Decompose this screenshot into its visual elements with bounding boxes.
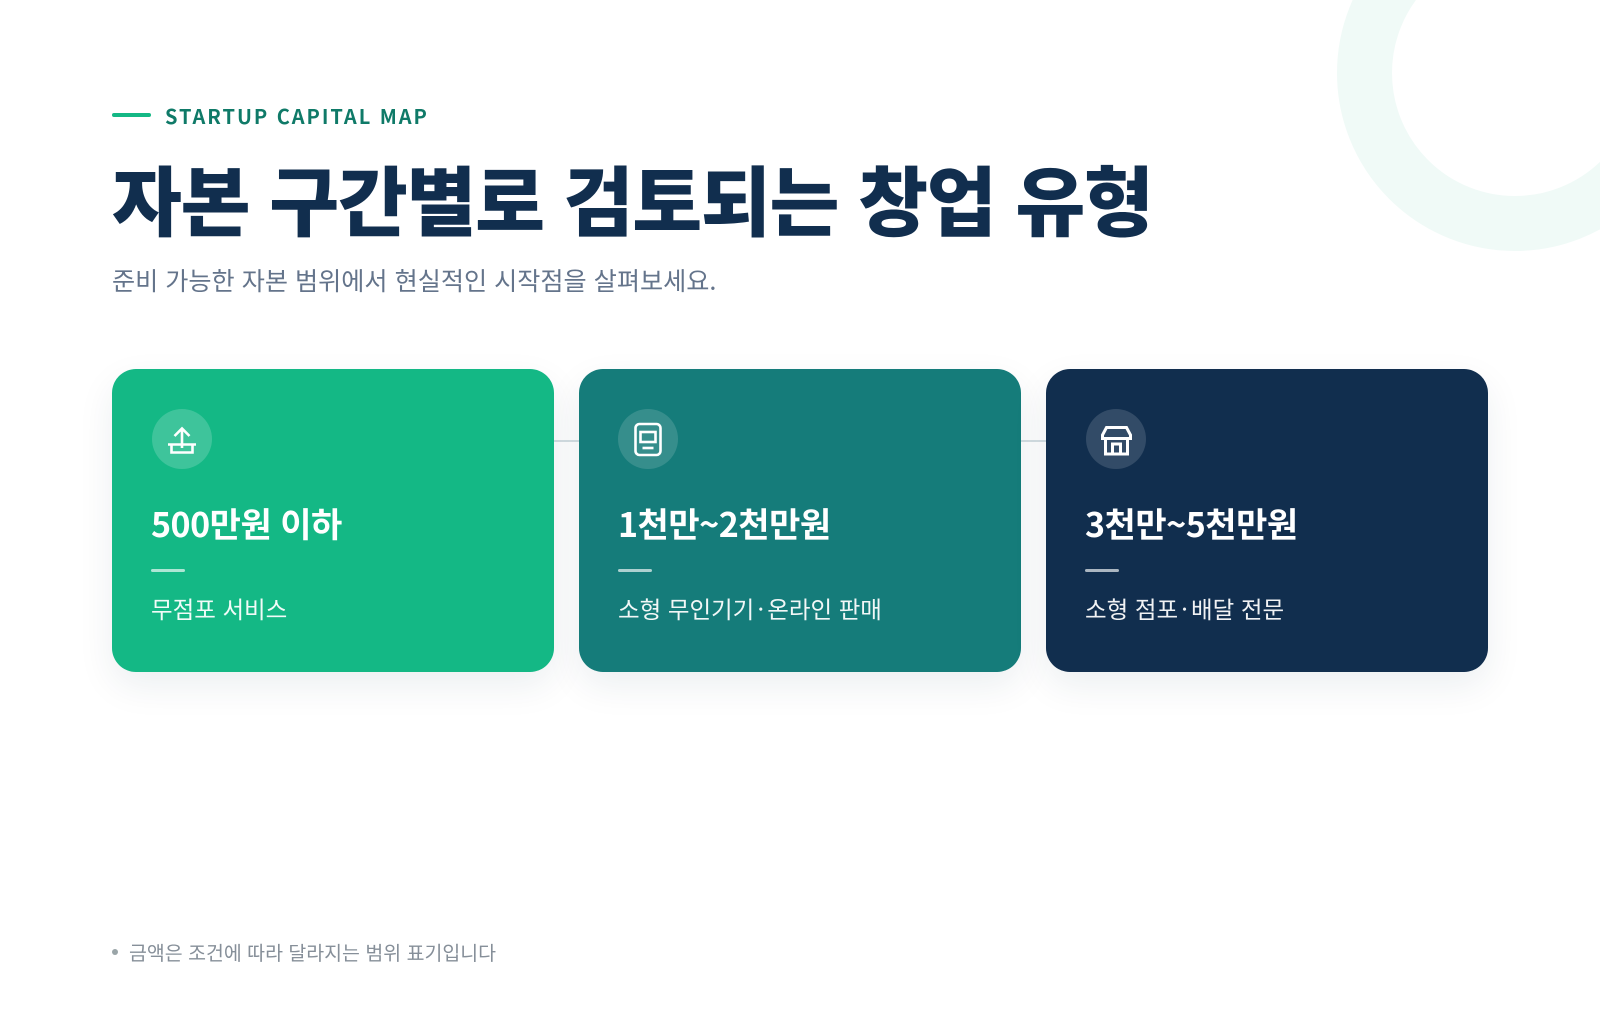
- value: 500만원 이하: [151, 498, 342, 547]
- subtitle: 준비 가능한 자본 범위에서 현실적인 시작점을 살펴보세요.: [112, 262, 716, 298]
- panel: card 3천만~5천만원: [1046, 369, 1488, 672]
- description: 소형 점포·배달 전문: [1085, 591, 1284, 625]
- divider: [151, 569, 185, 572]
- value: 3천만~5천만원: [1085, 498, 1298, 547]
- panel: card 1천만~2천만원: [579, 369, 1021, 672]
- divider: [618, 569, 652, 572]
- icon: kiosk: [618, 409, 678, 469]
- divider: [1085, 569, 1119, 572]
- connector: card 2 to card 3: [1021, 440, 1046, 442]
- icon: box with up arrow: [152, 409, 212, 469]
- footnote: 금액은 조건에 따라 달라지는 범위 표기입니다: [129, 937, 496, 966]
- value: 1천만~2천만원: [618, 498, 831, 547]
- description: 무점포 서비스: [151, 591, 287, 625]
- title: 자본 구간별로 검토되는 창업 유형: [112, 142, 1153, 252]
- description: 소형 무인기기·온라인 판매: [618, 591, 882, 625]
- connector: card 1 to card 2: [554, 440, 579, 442]
- panel: card 500만원 이하: [112, 369, 554, 672]
- kicker label: STARTUP CAPITAL MAP: [165, 101, 429, 130]
- decorative ring: [1337, 0, 1600, 251]
- icon: storefront: [1086, 409, 1146, 469]
